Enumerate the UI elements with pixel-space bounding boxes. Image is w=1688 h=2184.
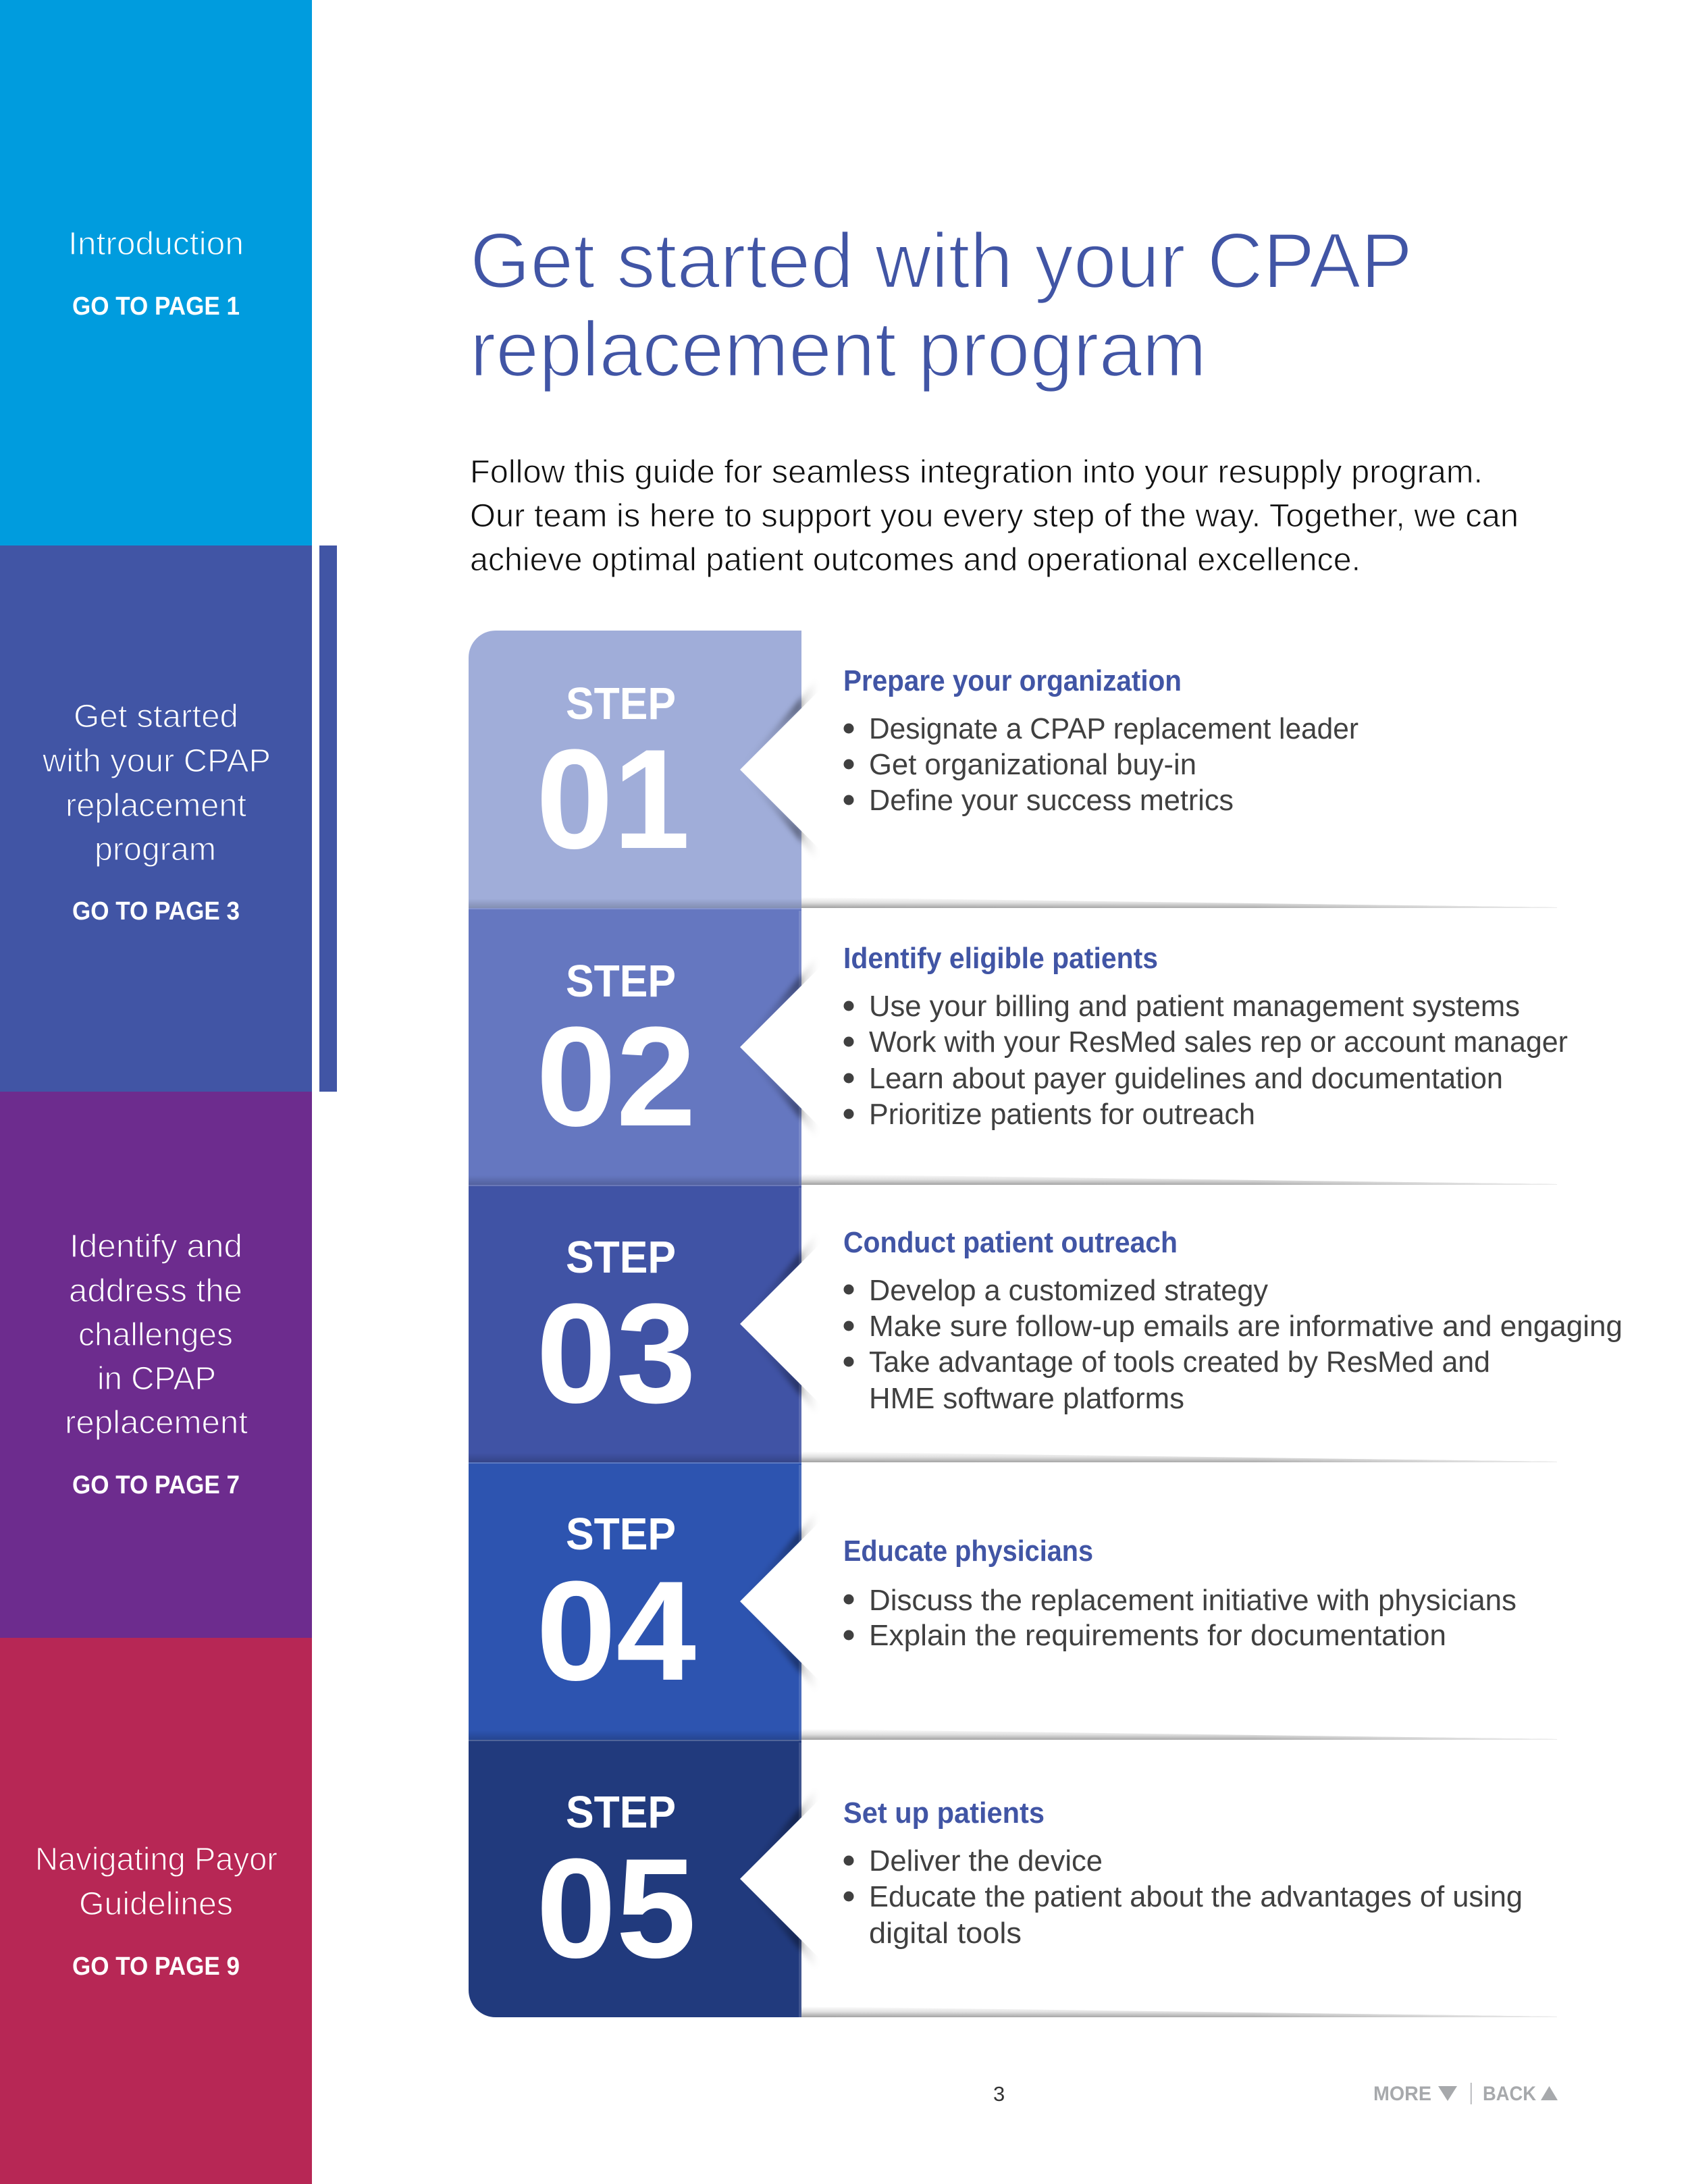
step 4 bullets: Discuss the replacement initiative with physicians xyxy=(869,1584,1516,1617)
nav panel: Identify challenges: in CPAP xyxy=(97,1361,216,1397)
nav panel: Get started: GO TO PAGE 3 xyxy=(72,897,240,926)
step 4 xyxy=(469,1462,1557,1740)
nav panel: Payor Guidelines: GO TO PAGE 9 xyxy=(72,1952,240,1981)
step 2 heading: Identify eligible patients xyxy=(843,942,1158,975)
step 3 xyxy=(469,1185,1623,1462)
step 5 divider xyxy=(801,2006,1557,2017)
step 3 notch xyxy=(740,1233,824,1415)
nav panel: Payor Guidelines xyxy=(0,1638,312,2184)
title xyxy=(470,217,1413,393)
title: Get started with your CPAP xyxy=(470,217,1413,304)
step 1 xyxy=(469,631,1557,908)
step 2 bullets xyxy=(844,990,1568,1131)
step 1 bullets: Define your success metrics xyxy=(869,784,1234,817)
nav panel: Introduction: Introduction xyxy=(68,226,244,262)
step 1 bullets xyxy=(844,712,1359,817)
active page marker xyxy=(319,545,337,1092)
step 3 bullets: HME software platforms xyxy=(869,1382,1184,1415)
nav panel: Get started: program xyxy=(95,832,216,868)
step 3 bullets xyxy=(844,1274,1623,1415)
nav panel: Identify challenges: GO TO PAGE 7 xyxy=(72,1471,240,1499)
intro paragraph: Our team is here to support you every step of the way. Together, we can xyxy=(470,498,1519,534)
step 1 heading: Prepare your organization xyxy=(843,664,1182,697)
step 4 label: STEP xyxy=(566,1509,676,1560)
step 2 number: 02 xyxy=(536,997,696,1156)
step 5 bullets: Deliver the device xyxy=(869,1844,1103,1877)
footer navigation: BACK xyxy=(1483,2083,1536,2105)
nav panel: Get started: with your CPAP xyxy=(42,743,271,779)
step 4 divider xyxy=(801,1729,1557,1740)
step 2 divider xyxy=(801,1174,1557,1185)
step 4 bullets: Explain the requirements for documentation xyxy=(869,1619,1446,1652)
step 5 notch xyxy=(740,1788,824,1970)
step 5 heading: Set up patients xyxy=(843,1796,1045,1830)
step 1 bullets: Get organizational buy-in xyxy=(869,748,1196,781)
step 2 xyxy=(469,908,1568,1185)
nav panel: Introduction: GO TO PAGE 1 xyxy=(72,292,240,321)
step 4 notch xyxy=(740,1510,824,1693)
nav panel: Get started: replacement xyxy=(65,788,246,824)
title: replacement program xyxy=(470,305,1207,393)
footer navigation xyxy=(1373,2083,1558,2105)
step 2 panel xyxy=(469,908,801,1185)
step 2 notch xyxy=(740,956,824,1138)
step 4 number: 04 xyxy=(536,1551,696,1710)
step 2 label: STEP xyxy=(566,956,676,1007)
step 3 divider xyxy=(801,1451,1557,1462)
step 1 label: STEP xyxy=(566,678,676,729)
footer navigation: MORE xyxy=(1373,2083,1431,2105)
page number: 3 xyxy=(993,2082,1005,2106)
step 4 bullets xyxy=(844,1584,1516,1652)
step 3 heading: Conduct patient outreach xyxy=(843,1226,1178,1259)
step 5 panel xyxy=(469,1740,801,2017)
nav panel: Identify challenges: address the xyxy=(69,1273,242,1309)
step 1 notch xyxy=(740,678,824,861)
step 5 label: STEP xyxy=(566,1787,676,1838)
step 5 bullets: digital tools xyxy=(869,1917,1022,1950)
step 5 number: 05 xyxy=(536,1829,696,1988)
nav panel: Identify challenges: challenges xyxy=(78,1317,233,1353)
step 3 label: STEP xyxy=(566,1232,676,1283)
nav panel: Payor Guidelines: Guidelines xyxy=(79,1886,233,1922)
step 3 bullets: Take advantage of tools created by ResMed and xyxy=(869,1346,1490,1379)
step 1 bullets: Designate a CPAP replacement leader xyxy=(869,712,1359,745)
intro paragraph: Follow this guide for seamless integration into your resupply program. xyxy=(470,454,1483,490)
sidebar navigation xyxy=(0,0,337,2184)
nav panel: Get started xyxy=(0,545,312,1092)
step 5 bullets xyxy=(844,1844,1523,1950)
step 3 bullets: Make sure follow-up emails are informative and engaging xyxy=(869,1310,1623,1343)
nav panel: Identify challenges: replacement xyxy=(65,1405,248,1441)
intro paragraph: achieve optimal patient outcomes and operational excellence. xyxy=(470,542,1361,578)
nav panel: Payor Guidelines: Navigating Payor xyxy=(35,1842,278,1877)
step 1 number: 01 xyxy=(536,720,690,878)
nav panel: Identify challenges xyxy=(0,1092,312,1638)
step 1 divider xyxy=(801,897,1557,908)
step 2 bullets: Prioritize patients for outreach xyxy=(869,1098,1255,1131)
step 2 bullets: Use your billing and patient management systems xyxy=(869,990,1520,1023)
nav panel: Introduction xyxy=(0,0,312,545)
step 5 bullets: Educate the patient about the advantages of using xyxy=(869,1880,1523,1913)
step 3 bullets: Develop a customized strategy xyxy=(869,1274,1268,1307)
nav panel: Get started: Get started xyxy=(74,699,238,735)
intro paragraph xyxy=(470,454,1519,578)
step 1 panel xyxy=(469,631,801,908)
step 4 heading: Educate physicians xyxy=(843,1535,1093,1568)
step 3 number: 03 xyxy=(536,1274,696,1433)
step 5 xyxy=(469,1740,1557,2017)
step 3 panel xyxy=(469,1185,801,1462)
step 2 bullets: Work with your ResMed sales rep or account manager xyxy=(869,1026,1568,1059)
step 4 panel xyxy=(469,1462,801,1740)
nav panel: Identify challenges: Identify and xyxy=(70,1229,242,1264)
step 2 bullets: Learn about payer guidelines and documentation xyxy=(869,1062,1503,1095)
